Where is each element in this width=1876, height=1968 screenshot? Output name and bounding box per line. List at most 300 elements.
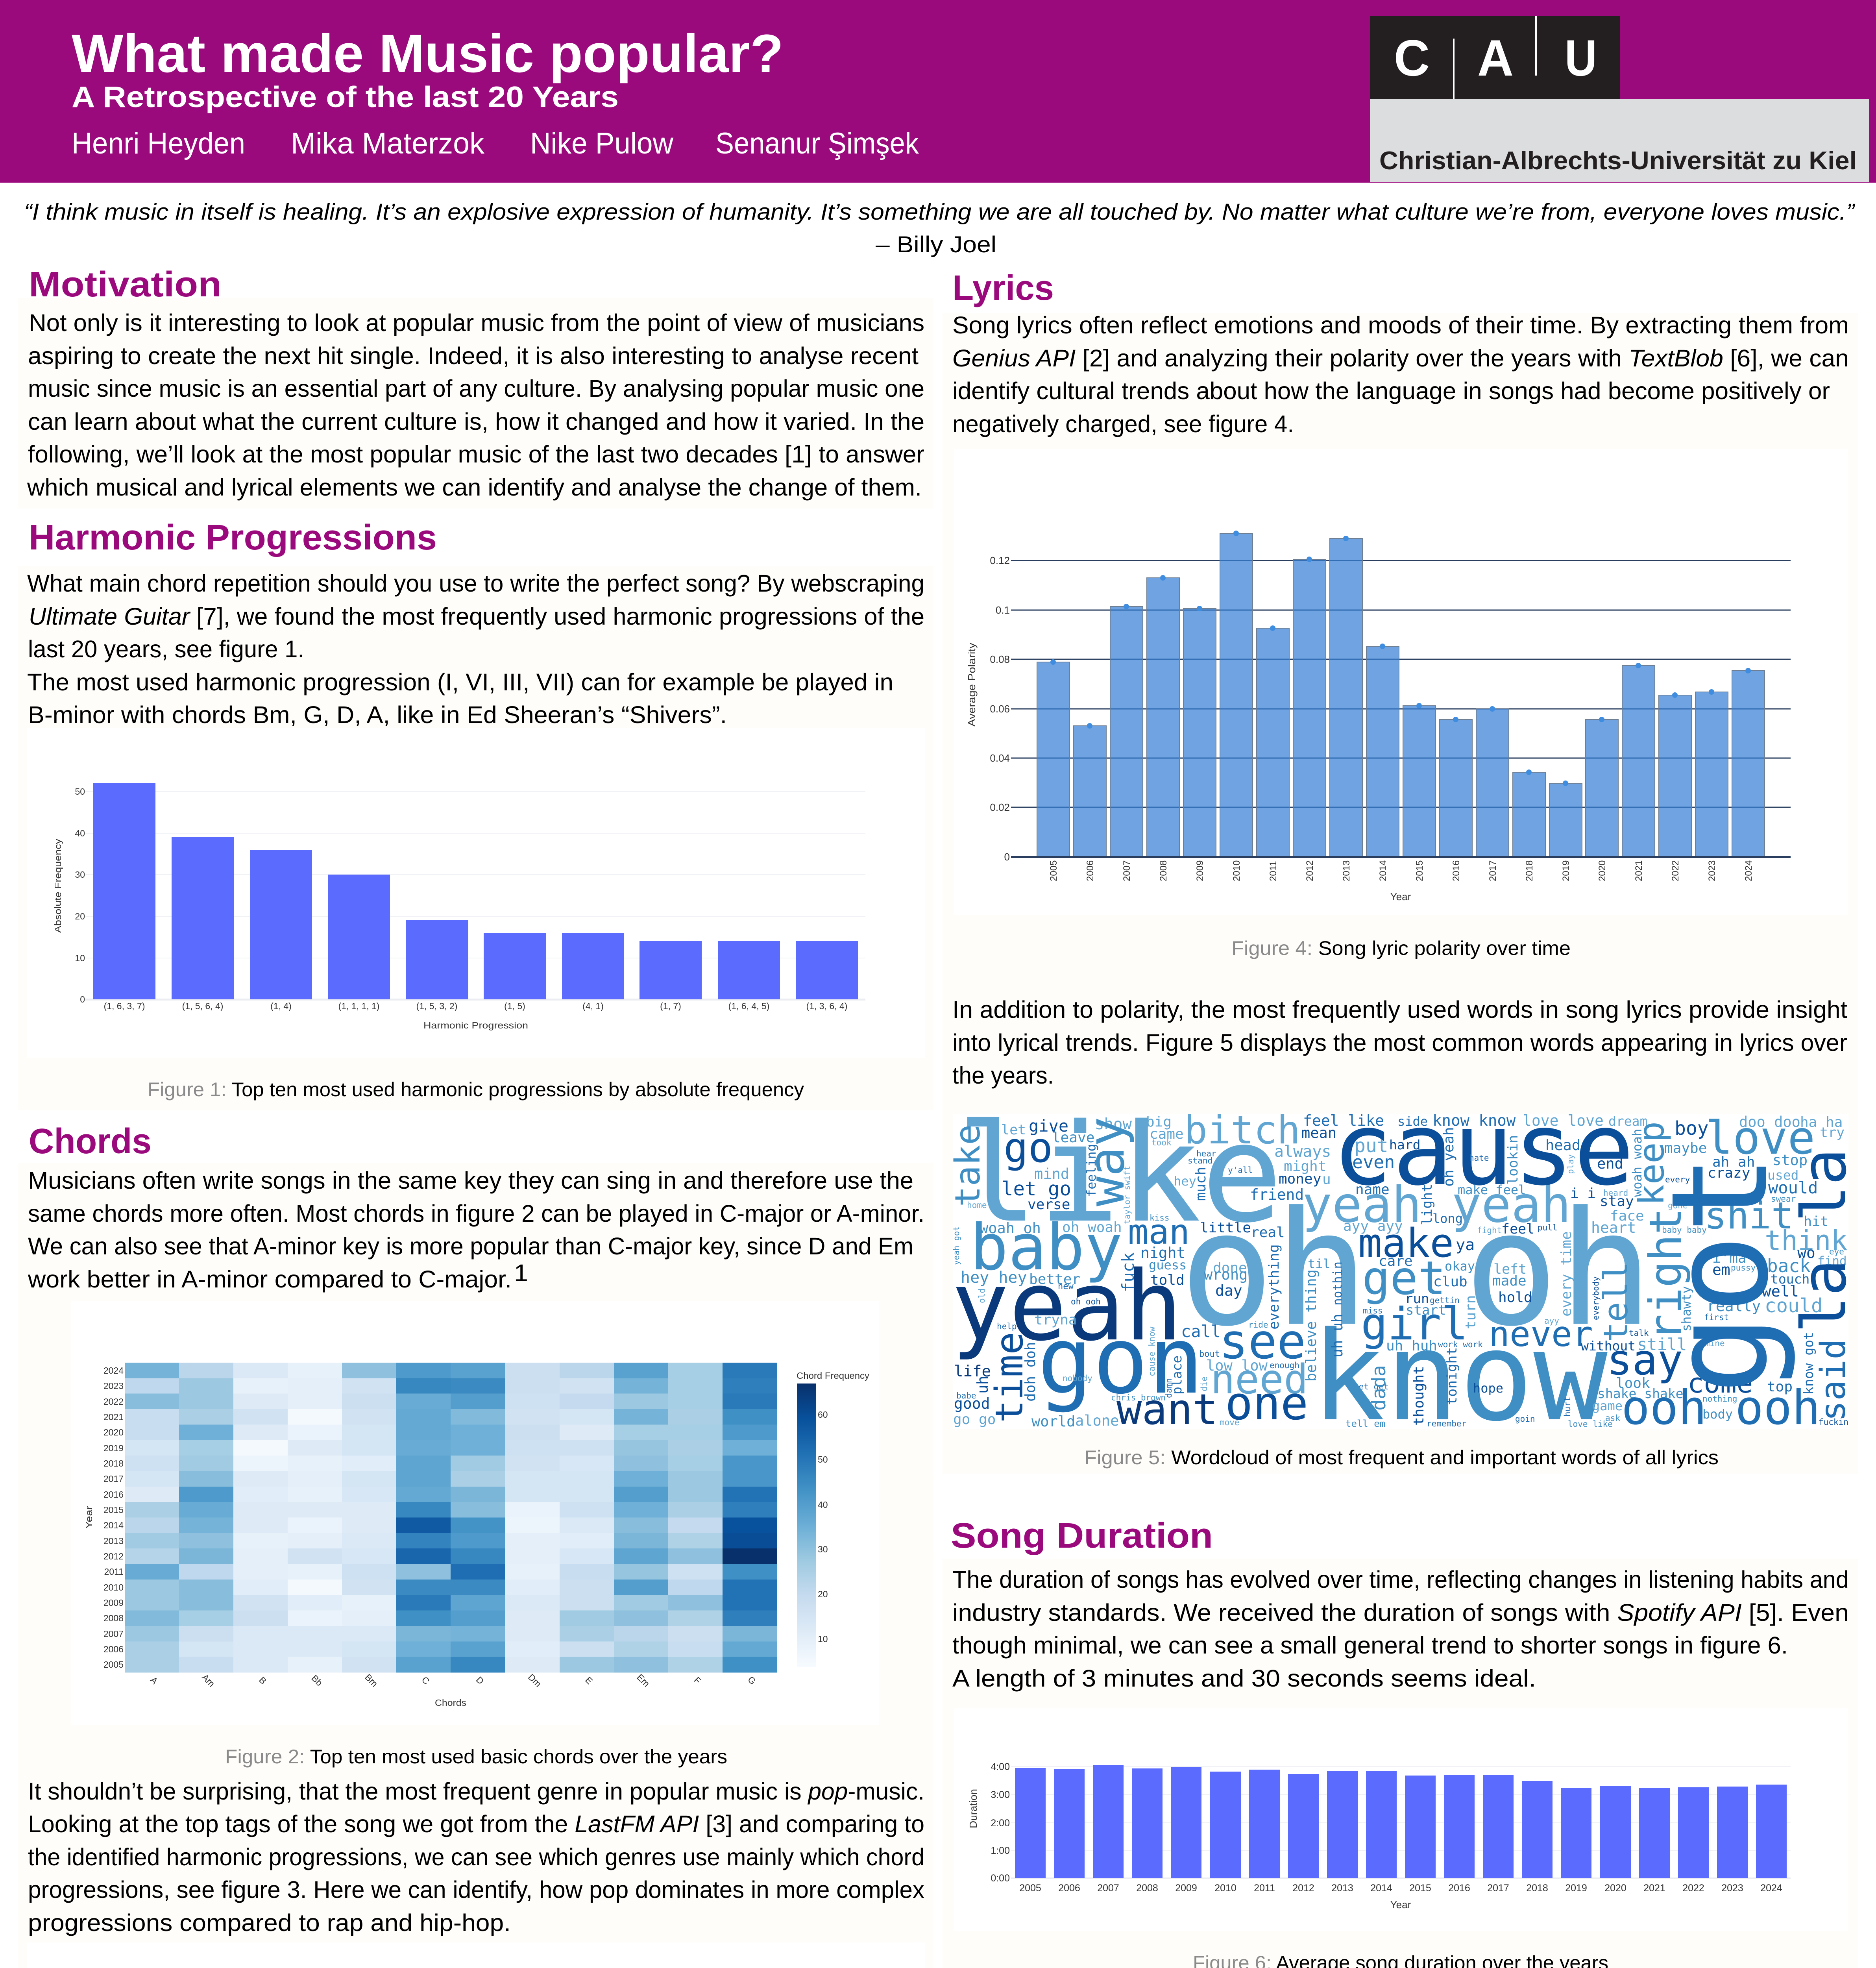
- text block: word frequency: In addition to polarity, the most frequently used words in song lyrics provide insight: [952, 996, 1847, 1023]
- word cloud: talk: [1629, 1328, 1649, 1338]
- text block: song duration: [952, 1566, 1849, 1692]
- bar chart: harmonic progression frequency: 30: [75, 869, 85, 880]
- bar chart: song duration: 2014: [1370, 1883, 1392, 1894]
- bar chart: lyric polarity: 0.06: [990, 703, 1010, 715]
- word cloud: die: [1200, 1376, 1209, 1391]
- word cloud: let go: [1002, 1178, 1071, 1200]
- bar chart: lyric polarity: 2010: [1231, 860, 1242, 881]
- heatmap: chord frequency by year: Em: [635, 1672, 652, 1689]
- heatmap: chord frequency by year: 2010: [104, 1582, 124, 1593]
- word cloud: side: [1397, 1114, 1428, 1129]
- bar chart: song duration: 2016: [1448, 1883, 1470, 1894]
- bar chart: lyric polarity: 2015: [1414, 860, 1425, 881]
- word cloud: enough: [1270, 1361, 1299, 1370]
- bar chart: lyric polarity: 0.08: [990, 653, 1010, 665]
- word cloud: think: [1765, 1224, 1848, 1257]
- heading: song duration: Song Duration: [951, 1516, 1213, 1556]
- bar chart: song duration: 2022: [1682, 1883, 1704, 1894]
- bar chart: song duration: 2015: [1409, 1883, 1431, 1894]
- word cloud: know know: [1432, 1112, 1516, 1130]
- word cloud: oh oh: [1179, 1178, 1653, 1361]
- word cloud: time: [987, 1332, 1031, 1423]
- word cloud: pussy: [1731, 1263, 1756, 1273]
- bar chart: lyric polarity: 0.04: [990, 752, 1010, 764]
- word cloud: wrong: [1204, 1266, 1248, 1283]
- bar chart: song duration: Year: [1390, 1899, 1411, 1911]
- word cloud: right: [1640, 1208, 1691, 1341]
- text block: word frequency: into lyrical trends. Figure 5 displays the most common words appearing in lyrics over: [952, 1029, 1847, 1056]
- word cloud: hard: [1389, 1137, 1420, 1152]
- word cloud: tell: [1597, 1261, 1636, 1342]
- word cloud: hear: [1196, 1149, 1216, 1158]
- word cloud: would: [1768, 1178, 1818, 1197]
- bar chart: song duration: 2023: [1721, 1883, 1743, 1894]
- bar chart: lyric polarity: 2013: [1341, 860, 1352, 881]
- word cloud: shit: [1704, 1195, 1793, 1237]
- bar chart: lyric polarity: 2006: [1085, 860, 1096, 881]
- word cloud: mind: [1034, 1165, 1069, 1182]
- word cloud: hit: [1804, 1214, 1828, 1230]
- text block: motivation: [27, 309, 924, 501]
- panel: harmonic progressions: [27, 518, 925, 1101]
- word cloud: like: [957, 1095, 1283, 1253]
- subtitle: A Retrospective of the last 20 Years: [72, 80, 619, 113]
- heatmap: chord frequency by year: 2019: [104, 1443, 124, 1453]
- university logo: [1370, 16, 1869, 182]
- heatmap: chord frequency by year: F: [692, 1675, 703, 1686]
- word cloud: lookin: [1505, 1135, 1521, 1185]
- word cloud: yeah yeah: [1302, 1176, 1571, 1234]
- word cloud: put: [1354, 1135, 1388, 1157]
- word cloud: la la: [1788, 1148, 1860, 1333]
- word cloud: ah ah: [1712, 1154, 1755, 1170]
- word cloud: feel: [1501, 1221, 1534, 1237]
- bar chart: lyric polarity: 0: [1004, 851, 1010, 863]
- text block: lyrics: Genius API [2] and analyzing their polarity over the years with TextBlob [6], we can: [952, 345, 1849, 372]
- word cloud: show: [1095, 1115, 1132, 1133]
- bar chart: harmonic progression frequency: 0: [80, 994, 85, 1004]
- word cloud: dada: [1368, 1365, 1390, 1411]
- bar chart: harmonic progression frequency: (1, 6, 3, 7): [104, 1001, 145, 1011]
- heatmap: chord frequency by year: Chords: [435, 1698, 466, 1708]
- panel: lyrics: [948, 268, 1860, 1469]
- quote: “I think music in itself is healing. It’s an explosive expression of humanity. It’s something we are all touched by. No matter what culture we’re from, everyone loves music.”: [24, 199, 1856, 225]
- bar chart: song duration: [954, 1708, 1848, 1931]
- text block: song duration: The duration of songs has evolved over time, reflecting changes in listening habits and: [952, 1566, 1849, 1593]
- word cloud: know: [1311, 1305, 1608, 1448]
- colour scale legend: 40: [818, 1500, 828, 1510]
- word cloud: find: [1817, 1254, 1847, 1268]
- word cloud: come: [1687, 1368, 1753, 1399]
- word cloud: end: [1597, 1155, 1623, 1172]
- word cloud: okay: [1445, 1259, 1475, 1274]
- word cloud: everything: [1266, 1244, 1282, 1330]
- word cloud: believe thing: [1303, 1269, 1320, 1382]
- word cloud: miss: [1363, 1306, 1383, 1315]
- caption: figure 5: Figure 5: Wordcloud of most frequent and important words of all lyrics: [1084, 1446, 1719, 1469]
- word cloud: boy: [1675, 1117, 1709, 1139]
- heatmap: chord frequency by year: G: [746, 1674, 758, 1687]
- word cloud: i'ma: [1712, 1250, 1747, 1266]
- word cloud: bout: [1199, 1349, 1220, 1359]
- word cloud: look: [1616, 1375, 1650, 1391]
- word cloud: hey: [1174, 1174, 1196, 1189]
- panel: song duration: [951, 1516, 1849, 1968]
- word cloud: heart: [1591, 1219, 1636, 1236]
- bar chart: song duration: 2007: [1097, 1883, 1119, 1894]
- word cloud: friend: [1250, 1186, 1304, 1203]
- text block: genres: progressions compared to rap and hip-hop.: [28, 1909, 511, 1936]
- text block: motivation: music since music is an essential part of any culture. By analysing popular music one: [28, 375, 924, 402]
- word cloud: came: [1150, 1126, 1184, 1142]
- colour scale legend: [797, 1371, 870, 1667]
- bar chart: lyric polarity: 2022: [1670, 860, 1681, 881]
- bar chart: harmonic progression frequency: (4, 1): [582, 1001, 604, 1011]
- word cloud: stand: [1188, 1156, 1212, 1165]
- heatmap: chord frequency by year: 2017: [104, 1474, 124, 1484]
- word cloud: mine: [1705, 1339, 1725, 1348]
- word cloud: head: [1545, 1137, 1580, 1154]
- word cloud: oh woah: [1062, 1219, 1122, 1236]
- word cloud: crazy: [1708, 1165, 1750, 1181]
- word cloud: told: [1150, 1272, 1185, 1288]
- word cloud: little: [1200, 1220, 1251, 1236]
- bar chart: lyric polarity: 2024: [1743, 860, 1754, 881]
- bar chart: harmonic progression frequency: (1, 4): [270, 1001, 292, 1011]
- bar chart: song duration: 3:00: [991, 1789, 1010, 1800]
- panel: chords: [27, 1122, 925, 1968]
- bar chart: harmonic progression frequency: 20: [75, 911, 85, 921]
- word cloud: love love: [1523, 1112, 1604, 1129]
- text block: word frequency: [952, 996, 1847, 1089]
- text block: motivation: aspiring to create the next hit single. Indeed, it is also interesting to analyse recent: [28, 342, 919, 369]
- word cloud: said: [1813, 1339, 1853, 1421]
- bubble chart: genre tags by progression: [27, 1942, 925, 1968]
- word cloud: start: [1406, 1302, 1446, 1318]
- word cloud: name: [1355, 1182, 1390, 1198]
- word cloud: face: [1610, 1208, 1644, 1224]
- text block: harmonic progressions: What main chord repetition should you use to write the perfect song? By webscraping: [27, 570, 924, 597]
- heatmap: chord frequency by year: Bm: [363, 1672, 380, 1689]
- word cloud: nothin: [1331, 1261, 1345, 1306]
- word cloud: way: [1078, 1117, 1135, 1206]
- word cloud: love: [1705, 1112, 1815, 1165]
- bar chart: lyric polarity: 2014: [1378, 860, 1388, 881]
- heatmap: chord frequency by year: 2008: [104, 1613, 124, 1623]
- text block: song duration: industry standards. We received the duration of songs with Spotify API [5]. Even: [952, 1599, 1849, 1626]
- heatmap: chord frequency by year: Year: [84, 1506, 94, 1529]
- word cloud: better: [1029, 1271, 1080, 1287]
- bar chart: lyric polarity: 2008: [1158, 860, 1169, 881]
- bar chart: song duration: Duration: [967, 1789, 979, 1828]
- heatmap: chord frequency by year: 2011: [104, 1567, 124, 1577]
- word cloud: em: [1712, 1261, 1730, 1278]
- word cloud: much: [1193, 1167, 1209, 1201]
- bar chart: lyric polarity: 2018: [1524, 860, 1535, 881]
- word cloud: damn: [1164, 1378, 1174, 1398]
- word cloud: day: [1215, 1282, 1242, 1299]
- word cloud: uh: [974, 1376, 991, 1394]
- text block: genres: progressions, see figure 3. Here we can identify, how pop dominates in more complex: [28, 1876, 924, 1903]
- heatmap: chord frequency by year: 2006: [104, 1644, 124, 1654]
- word cloud: without: [1581, 1338, 1636, 1354]
- colour scale legend: 20: [818, 1589, 828, 1599]
- word cloud: well: [1762, 1283, 1799, 1300]
- word cloud: ya: [1456, 1236, 1475, 1254]
- panel: motivation: [27, 265, 924, 501]
- bar chart: song duration: 2017: [1487, 1883, 1509, 1894]
- colour scale legend: Chord Frequency: [797, 1371, 870, 1381]
- word cloud: tonight: [1444, 1347, 1460, 1405]
- authors: [72, 127, 919, 160]
- quote: – Billy Joel: [876, 232, 996, 257]
- word cloud: shawty: [1679, 1286, 1694, 1332]
- word cloud: chris brown: [1111, 1393, 1166, 1402]
- word cloud: make: [1358, 1220, 1454, 1266]
- colour scale legend: 30: [818, 1544, 828, 1554]
- word cloud: game: [1592, 1398, 1623, 1413]
- word cloud: cause know: [1147, 1326, 1157, 1376]
- bar chart: lyric polarity: 0.12: [990, 555, 1010, 566]
- bar chart: song duration: 4:00: [991, 1761, 1010, 1772]
- colour scale legend: 60: [818, 1409, 828, 1420]
- heatmap: chord frequency by year: 2012: [104, 1551, 124, 1561]
- word cloud: feel like: [1303, 1112, 1384, 1129]
- text block: genres: [28, 1778, 924, 1936]
- word cloud: see: [1219, 1314, 1306, 1370]
- word cloud: back: [1767, 1255, 1811, 1276]
- heatmap: chord frequency by year: 2023: [104, 1381, 124, 1391]
- word cloud: hold: [1498, 1289, 1532, 1306]
- word cloud: i i: [1570, 1186, 1596, 1202]
- text block: word frequency: the years.: [952, 1062, 1054, 1089]
- bar chart: song duration: 2013: [1331, 1883, 1353, 1894]
- heatmap: chord frequency by year: 2007: [104, 1629, 124, 1639]
- caption: figure 4: Figure 4: Song lyric polarity over time: [1231, 937, 1571, 959]
- bar chart: lyric polarity: 2019: [1561, 860, 1571, 881]
- word cloud: take: [948, 1124, 988, 1207]
- word cloud: alone: [1075, 1412, 1119, 1429]
- word cloud: still: [1637, 1335, 1687, 1354]
- authors: Mika Materzok: [291, 127, 485, 160]
- word cloud: pull: [1538, 1223, 1558, 1232]
- bar chart: song duration: 2011: [1254, 1883, 1275, 1894]
- word cloud: help: [997, 1322, 1017, 1331]
- text block: motivation: Not only is it interesting to look at popular music from the point of view of musicians: [29, 309, 924, 336]
- bar chart: harmonic progression frequency: 10: [75, 953, 85, 963]
- title: What made Music popular?: [72, 24, 784, 84]
- word cloud: hurt: [1563, 1396, 1572, 1417]
- word cloud: old: [977, 1288, 987, 1303]
- bar chart: lyric polarity: 2017: [1488, 860, 1498, 881]
- heatmap: chord frequency by year: A: [148, 1675, 160, 1686]
- word cloud: new: [1058, 1282, 1074, 1291]
- text block: chords: Musicians often write songs in the same key they can sing in and therefore use the: [28, 1167, 913, 1194]
- heatmap: chord frequency by year: 2005: [104, 1659, 124, 1670]
- bar chart: song duration: 2012: [1292, 1883, 1314, 1894]
- text block: genres: Looking at the top tags of the song we got from the LastFM API [3] and comparing to: [28, 1811, 924, 1837]
- text block: genres: It shouldn’t be surprising, that the most frequent genre in popular music is pop-music.: [28, 1778, 924, 1805]
- bar chart: harmonic progression frequency: (1, 6, 4, 5): [728, 1001, 769, 1011]
- text block: lyrics: identify cultural trends about how the language in songs had become positively or: [952, 377, 1830, 404]
- word cloud: big: [1146, 1114, 1172, 1130]
- authors: Senanur Şimşek: [715, 127, 919, 160]
- word cloud: thought: [1411, 1366, 1427, 1426]
- word cloud: low low: [1206, 1357, 1268, 1374]
- word cloud: every: [1665, 1175, 1690, 1184]
- word cloud: might: [1284, 1158, 1326, 1175]
- word cloud: left: [1493, 1261, 1527, 1277]
- bar chart: lyric polarity: Average Polarity: [966, 643, 978, 727]
- colour scale legend: 10: [818, 1634, 828, 1644]
- word cloud: fuckin: [1819, 1417, 1848, 1427]
- text block: harmonic progressions: last 20 years, see figure 1.: [28, 636, 304, 662]
- word cloud: never: [1489, 1314, 1593, 1354]
- text block: motivation: can learn about what the current culture is, how it changed and how it varied. In the: [28, 408, 924, 435]
- bar chart: harmonic progression frequency: (1, 1, 1, 1): [338, 1001, 379, 1011]
- bar chart: lyric polarity: 2007: [1122, 860, 1132, 881]
- word cloud: fight: [1477, 1226, 1502, 1235]
- bar chart: lyric polarity: 2012: [1305, 860, 1315, 881]
- word cloud: call: [1181, 1322, 1221, 1341]
- bar chart: song duration: 2019: [1565, 1883, 1587, 1894]
- bar chart: song duration: 2018: [1526, 1883, 1548, 1894]
- word cloud: let: [1001, 1122, 1026, 1138]
- word cloud: til: [1308, 1256, 1331, 1271]
- text block: lyrics: negatively charged, see figure 4.: [952, 411, 1294, 437]
- word cloud: remember: [1427, 1419, 1466, 1428]
- word cloud: get: [1362, 1251, 1446, 1305]
- heatmap: chord frequency by year: 2020: [104, 1427, 124, 1437]
- text block: harmonic progressions: The most used harmonic progression (I, VI, III, VII) can for example be played in: [27, 669, 893, 695]
- word cloud: hey hey: [961, 1269, 1027, 1287]
- text block: genres: the identified harmonic progressions, we can see which genres use mainly which chord: [28, 1844, 924, 1870]
- word cloud: tryna: [1034, 1312, 1077, 1328]
- bar chart: harmonic progression frequency: [27, 728, 925, 1058]
- word cloud: give: [1029, 1116, 1068, 1136]
- word cloud: good: [954, 1395, 990, 1412]
- text block: motivation: which musical and lyrical elements we can identify and analyse the change of them.: [27, 474, 922, 501]
- text block: song duration: A length of 3 minutes and 30 seconds seems ideal.: [952, 1665, 1536, 1692]
- word cloud: gettin: [1430, 1296, 1460, 1305]
- heading: harmonic progressions: Harmonic Progressions: [29, 518, 437, 557]
- word cloud: uh uh: [1329, 1314, 1346, 1358]
- word cloud: love like: [1568, 1419, 1613, 1429]
- bar chart: lyric polarity: 2020: [1597, 860, 1608, 881]
- word cloud: hope: [1473, 1381, 1503, 1396]
- bar chart: song duration: 2020: [1604, 1883, 1626, 1894]
- heading: chords: Chords: [29, 1122, 152, 1161]
- word cloud: every time: [1558, 1231, 1575, 1317]
- word cloud: baby baby: [1662, 1225, 1707, 1235]
- word cloud: oh yeah: [1441, 1127, 1457, 1187]
- word cloud: yeah: [951, 1250, 1183, 1362]
- bar chart: lyric polarity: 2009: [1195, 860, 1205, 881]
- bar chart: harmonic progression frequency: Absolute Frequency: [53, 838, 63, 933]
- heatmap: chord frequency by year: Bb: [310, 1673, 325, 1688]
- quote: [24, 199, 1856, 257]
- word cloud: nothing: [1702, 1394, 1737, 1404]
- word cloud: leave: [1052, 1130, 1094, 1146]
- word cloud: guess: [1149, 1258, 1187, 1273]
- bar chart: lyric polarity: [954, 449, 1848, 915]
- colour scale legend: 50: [818, 1454, 828, 1465]
- authors: Henri Heyden: [72, 127, 245, 160]
- word cloud: bitch: [1184, 1108, 1300, 1153]
- word cloud: shake shake: [1597, 1386, 1684, 1401]
- word cloud: goin: [1515, 1414, 1535, 1424]
- word cloud: hate: [1469, 1153, 1489, 1163]
- word cloud: stop: [1772, 1152, 1808, 1169]
- word cloud: [948, 1091, 1860, 1448]
- word cloud: made: [1492, 1273, 1527, 1289]
- authors: Nike Pulow: [530, 127, 674, 160]
- word cloud: eye: [1829, 1247, 1844, 1256]
- word cloud: doh doh: [1022, 1342, 1039, 1402]
- heatmap: chord frequency by year: B: [257, 1675, 268, 1686]
- word cloud: top: [1767, 1379, 1793, 1395]
- word cloud: world: [1031, 1413, 1075, 1430]
- word cloud: kiss: [1150, 1213, 1170, 1223]
- word cloud: turn: [1463, 1295, 1479, 1329]
- bar chart: song duration: 0:00: [991, 1873, 1010, 1884]
- text block: chords: work better in A-minor compared to C-major.: [28, 1266, 512, 1293]
- word cloud: woah oh: [980, 1220, 1041, 1237]
- text block: song duration: though minimal, we can see a small general trend to shorter songs in figure 6.: [952, 1632, 1788, 1659]
- text block: chords: same chords more often. Most chords in figure 2 can be played in C-major or A-minor.: [28, 1200, 924, 1227]
- word cloud: nobody: [1063, 1374, 1092, 1383]
- word cloud: baby: [970, 1211, 1123, 1284]
- word cloud: wo: [1797, 1244, 1815, 1261]
- word cloud: try: [1820, 1125, 1845, 1141]
- word cloud: could: [1765, 1295, 1823, 1317]
- bar chart: song duration: 2008: [1136, 1883, 1158, 1894]
- word cloud: get get: [1354, 1382, 1389, 1391]
- heatmap: chord frequency by year: D: [474, 1674, 486, 1686]
- heatmap: chord frequency by year: [71, 1301, 879, 1725]
- bar chart: lyric polarity: 0.02: [990, 801, 1010, 813]
- bar chart: lyric polarity: 2011: [1268, 861, 1279, 881]
- word cloud: say: [1607, 1336, 1683, 1385]
- word cloud: girl: [1361, 1298, 1468, 1350]
- text block: harmonic progressions: B-minor with chords Bm, G, D, A, like in Ed Sheeran’s “Shivers”.: [28, 701, 727, 728]
- text block: harmonic progressions: Ultimate Guitar [7], we found the most frequently used harmonic progressions of the: [29, 603, 924, 630]
- word cloud: uh huh: [1386, 1338, 1437, 1354]
- word cloud: cause: [1332, 1091, 1634, 1208]
- word cloud: feeling: [1084, 1144, 1099, 1197]
- bar chart: song duration: 2010: [1214, 1883, 1236, 1894]
- bar chart: lyric polarity: 0.1: [996, 604, 1010, 616]
- heatmap: chord frequency by year: Am: [200, 1672, 217, 1689]
- word cloud: home: [967, 1200, 987, 1210]
- word cloud: ayy ayy: [1343, 1218, 1403, 1234]
- word cloud: used: [1767, 1167, 1798, 1183]
- word cloud: life: [954, 1363, 991, 1380]
- text block: chords: [28, 1167, 924, 1293]
- heatmap: chord frequency by year: 2013: [104, 1536, 124, 1546]
- bar chart: song duration: 2:00: [991, 1818, 1010, 1829]
- word cloud: ayy: [1544, 1316, 1559, 1326]
- bar chart: harmonic progression frequency: 40: [75, 828, 85, 838]
- word cloud: make feel: [1458, 1182, 1526, 1197]
- text block: chords: We can also see that A-minor key is more popular than C-major key, since D and Em: [28, 1233, 913, 1260]
- word cloud: real: [1251, 1224, 1285, 1241]
- bar chart: song duration: 2005: [1019, 1883, 1041, 1894]
- heatmap: chord frequency by year: 2009: [104, 1598, 124, 1608]
- heatmap: chord frequency by year: Dm: [526, 1672, 543, 1689]
- heatmap: chord frequency by year: 2014: [104, 1520, 124, 1530]
- word cloud: man: [1128, 1212, 1190, 1252]
